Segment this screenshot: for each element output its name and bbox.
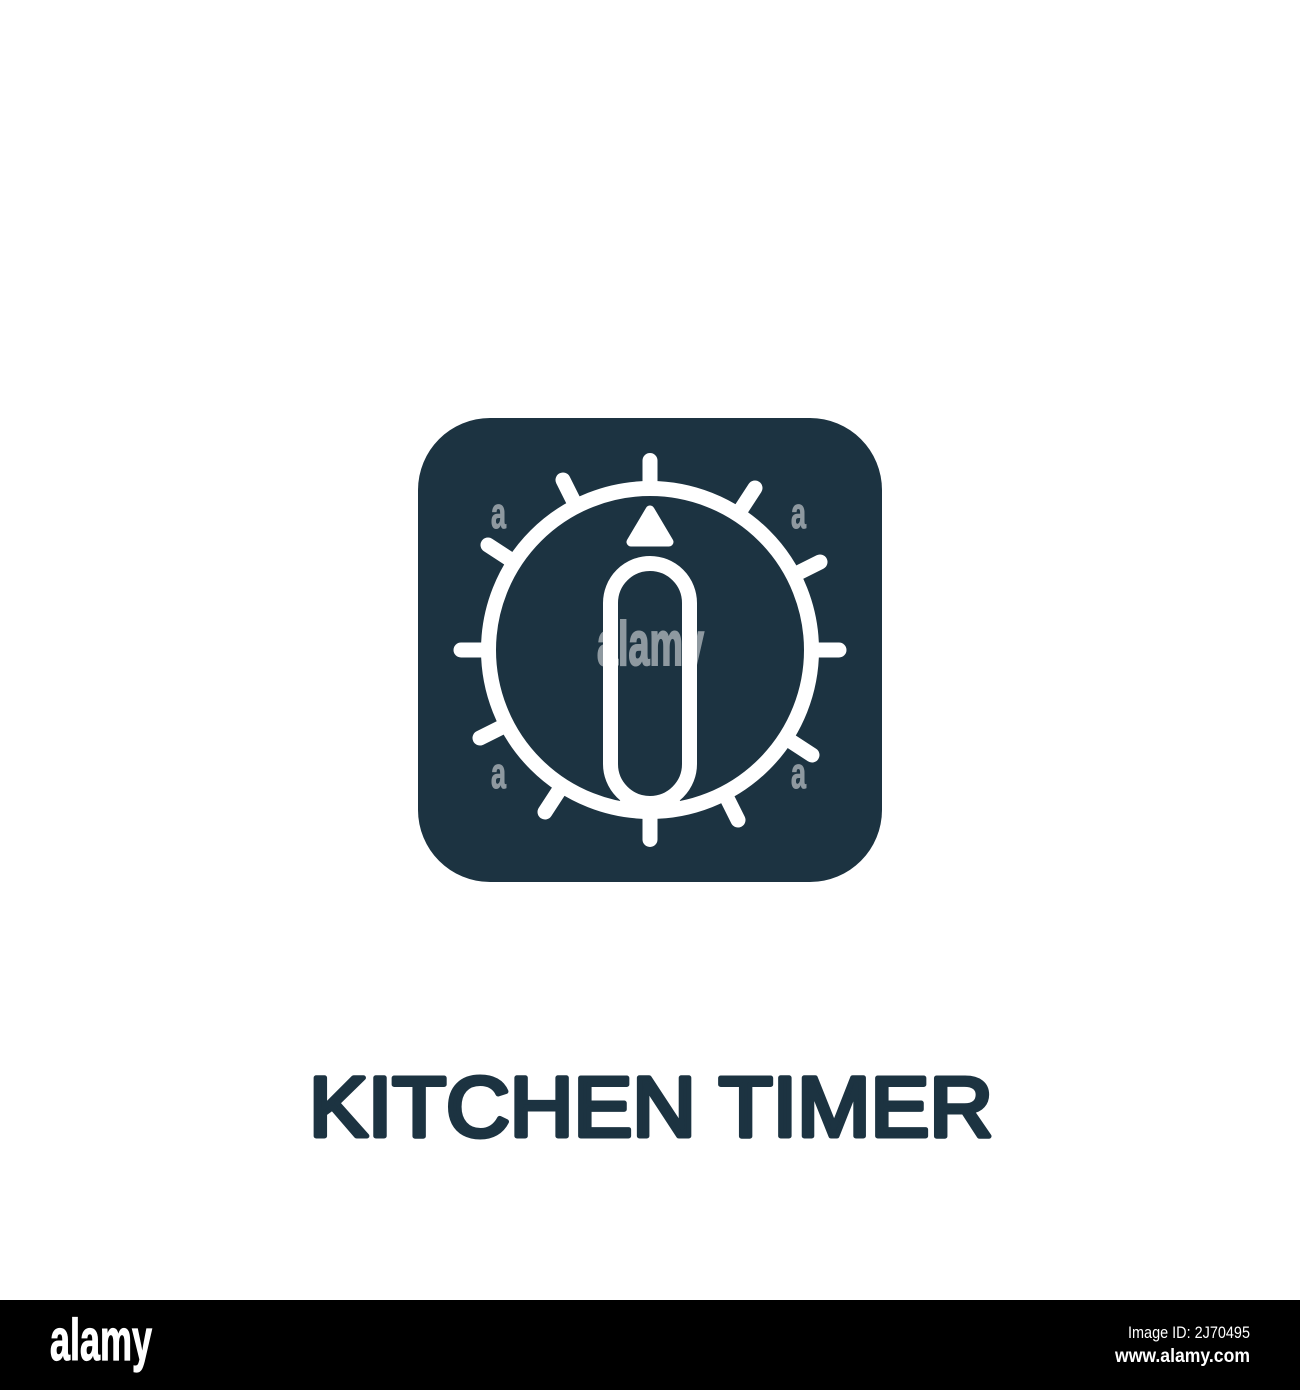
watermark: corner letters: a [491, 489, 506, 538]
pointer triangle [631, 510, 669, 542]
knob base join [612, 798, 688, 812]
footer logo: alamy [50, 1308, 152, 1373]
timer knob handle [610, 564, 690, 804]
watermark: corner letters: a [791, 489, 806, 538]
icon: kitchen timer [418, 418, 882, 882]
watermark: corner letters: a [491, 749, 506, 798]
image id: Image ID: 2J70495 [1128, 1323, 1250, 1342]
watermark: corner letters: a [791, 749, 806, 798]
watermark: corner letters [491, 489, 806, 798]
watermark: alamy: alamy [597, 610, 704, 679]
website: www.alamy.com [1114, 1346, 1250, 1367]
footer bar [0, 1300, 1300, 1390]
title: KITCHEN TIMER [309, 1060, 993, 1154]
timer dial ring [488, 488, 812, 812]
dial tick marks [461, 460, 839, 840]
icon background rounded square [418, 418, 882, 882]
